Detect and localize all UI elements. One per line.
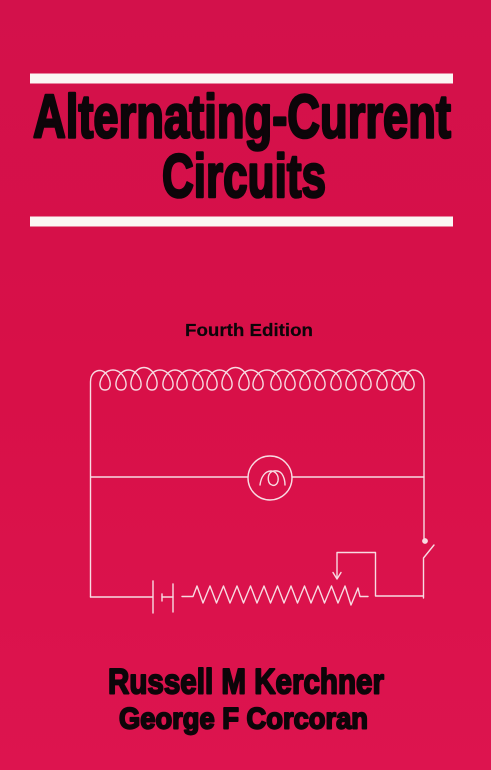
switch bbox=[423, 539, 434, 598]
bottom white bar bbox=[30, 216, 453, 226]
title: Circuits bbox=[162, 142, 326, 210]
authors bbox=[108, 662, 384, 736]
title bbox=[33, 82, 451, 210]
edition label: Fourth Edition bbox=[185, 320, 313, 340]
bottom left wire bbox=[90, 596, 152, 598]
inductor coil with outer frame bbox=[90, 368, 424, 597]
battery bbox=[153, 581, 173, 613]
circuit diagram bbox=[90, 368, 434, 613]
authors: George F Corcoran bbox=[119, 702, 368, 736]
authors: Russell M Kerchner bbox=[108, 662, 384, 702]
center lamp branch bbox=[91, 456, 424, 500]
top white bar bbox=[30, 74, 453, 84]
slider arrow bbox=[337, 552, 423, 596]
rheostat bbox=[182, 552, 423, 605]
